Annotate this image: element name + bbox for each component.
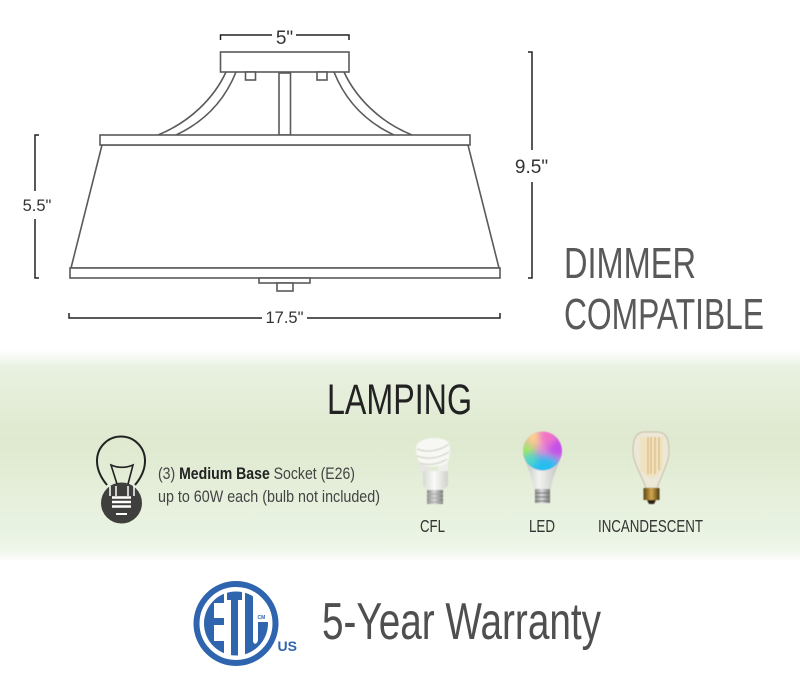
lamping heading: LAMPING xyxy=(327,376,472,424)
fixture line drawing xyxy=(70,52,500,291)
icon: ETL listed mark xyxy=(196,584,297,663)
icon: light bulb with socket xyxy=(97,436,145,524)
dimmer compatible label xyxy=(564,239,764,339)
dimension: 5.5 inch xyxy=(23,135,52,278)
bottom finial xyxy=(259,278,310,291)
socket description xyxy=(158,464,380,506)
bulb type labels: LED xyxy=(529,516,555,536)
fixture canopy xyxy=(220,52,349,72)
dimmer compatible label: DIMMER xyxy=(564,239,696,288)
top shade band xyxy=(100,135,470,145)
drum shade xyxy=(71,145,499,268)
socket description: up to 60W each (bulb not included) xyxy=(158,487,380,506)
dimension: 5 inch xyxy=(220,28,349,49)
green lamping band xyxy=(0,350,800,562)
dimension: 5.5 inch: 5.5" xyxy=(23,197,52,215)
socket description: (3) Medium Base Socket (E26) xyxy=(158,464,355,483)
icon: LED bulb xyxy=(522,431,563,504)
icon: CFL bulb xyxy=(416,438,450,504)
icon: ETL listed mark: US xyxy=(278,638,297,654)
icon: incandescent bulb xyxy=(633,432,669,504)
icon: ETL listed mark: CM xyxy=(258,615,265,621)
dimension: 5 inch: 5" xyxy=(276,28,293,49)
dimension: 9.5 inch: 9.5" xyxy=(515,157,548,178)
dimension: 17.5 inch xyxy=(69,309,500,327)
warranty text: 5-Year Warranty xyxy=(322,593,601,651)
dimension: 17.5 inch: 17.5" xyxy=(266,309,304,327)
canopy screws xyxy=(246,72,327,80)
fixture arms xyxy=(158,72,412,135)
bulb type labels xyxy=(420,516,703,536)
bottom shade band xyxy=(70,268,500,278)
center stem xyxy=(279,73,290,135)
bulb type labels: CFL xyxy=(420,516,445,536)
dimension: 9.5 inch xyxy=(515,52,548,278)
bulb type labels: INCANDESCENT xyxy=(598,516,703,536)
